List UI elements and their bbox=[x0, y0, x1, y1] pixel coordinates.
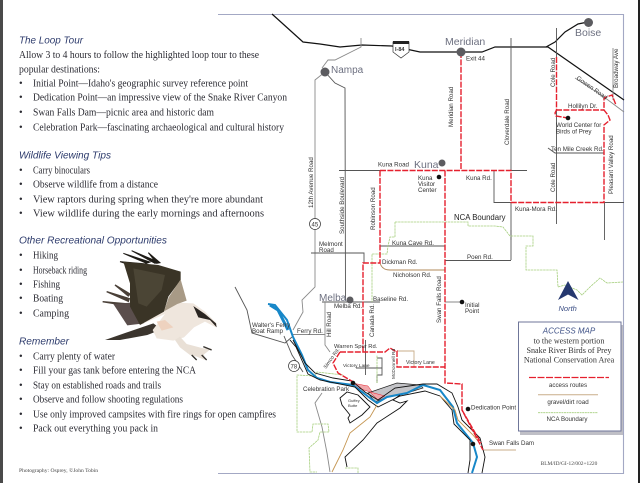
text block: remember list bbox=[19, 352, 276, 434]
roads bbox=[235, 28, 624, 472]
text block: remember list: • bbox=[19, 410, 23, 420]
text block: recreation list bbox=[19, 250, 87, 320]
text block: recreation list: • bbox=[19, 250, 23, 262]
highway 45 marker: 45 bbox=[312, 222, 319, 228]
road labels: Kuna bbox=[418, 175, 433, 182]
legend bbox=[518, 322, 623, 435]
icon: north arrow bbox=[558, 281, 578, 313]
text block: wildlife tips: View wildlife during the early mornings and afternoons bbox=[33, 208, 264, 220]
text block: remember list: Carry plenty of water bbox=[33, 352, 115, 362]
photo credit: Photography: Osprey, ©John Tobin bbox=[19, 467, 98, 474]
text block: wildlife tips: • bbox=[19, 208, 23, 220]
heading: Other Recreational Opportunities: Other Recreational Opportunities bbox=[19, 236, 167, 246]
city labels: Meridian bbox=[445, 36, 485, 48]
text block: recreation list: • bbox=[19, 280, 23, 290]
road labels: Victory Lane bbox=[406, 360, 435, 366]
legend: NCA boundary: NCA Boundary bbox=[547, 416, 588, 423]
text block: recreation list: Fishing bbox=[33, 280, 60, 290]
text block: recreation list: Hiking bbox=[33, 250, 58, 262]
road labels: Birds of Prey bbox=[556, 128, 592, 136]
text block: recreation list: • bbox=[19, 294, 23, 304]
text block: remember list: • bbox=[19, 380, 23, 392]
text block: loop tour: popular destinations: bbox=[19, 64, 100, 76]
road labels: Guffey bbox=[348, 398, 360, 403]
text block: wildlife tips: View raptors during spring when they're more abundant bbox=[33, 194, 263, 206]
legend subtitle: to the western portion bbox=[534, 336, 604, 346]
road labels: Boat Ramp bbox=[252, 328, 284, 335]
road labels: Swan Falls Dam bbox=[489, 440, 534, 447]
road labels: Melmont bbox=[319, 241, 343, 248]
text block: loop tour: • bbox=[19, 108, 23, 118]
highway: I-84: I-84 bbox=[395, 47, 405, 53]
city labels: Melba bbox=[319, 293, 347, 304]
heading: The Loop Tour: The Loop Tour bbox=[19, 36, 83, 46]
legend subtitle bbox=[524, 336, 615, 364]
road labels: Point bbox=[465, 308, 479, 315]
text block: loop tour: Celebration Park—fascinating archaeological and cultural history bbox=[33, 122, 285, 134]
icon: north arrow: North bbox=[558, 304, 577, 313]
text block: remember list: Pack out everything you pack in bbox=[33, 424, 159, 434]
road labels: NCA Boundary bbox=[454, 213, 506, 222]
icon: osprey bbox=[103, 251, 217, 360]
highway 78 marker bbox=[288, 360, 300, 372]
road labels: Hollilyn Dr. bbox=[568, 103, 598, 110]
road labels: Nicholson Rd. bbox=[393, 272, 432, 279]
city labels: Nampa bbox=[331, 65, 364, 76]
road labels: Exit 44 bbox=[466, 56, 485, 62]
text block: loop tour: Initial Point—Idaho's geographic survey reference point bbox=[33, 78, 248, 90]
text block: remember list: Fill your gas tank before entering the NCA bbox=[33, 366, 196, 376]
river and canyon bbox=[268, 304, 485, 473]
legend subtitle: National Conservation Area bbox=[524, 356, 615, 364]
road labels: Swan Falls Road bbox=[436, 276, 443, 323]
road labels: Meridian Road bbox=[448, 86, 455, 127]
road labels: McDonnell Rd bbox=[391, 349, 397, 379]
road labels: Gowen Road bbox=[575, 75, 609, 102]
text block: loop tour: • bbox=[19, 78, 23, 90]
road labels: Melba Rd. bbox=[334, 303, 362, 310]
legend subtitle: Snake River Birds of Prey bbox=[527, 346, 612, 355]
legend: gravel road: gravel/dirt road bbox=[547, 399, 589, 406]
road labels: Robinson Road bbox=[370, 187, 377, 230]
highway 78 marker: 78 bbox=[290, 364, 298, 370]
legend title: ACCESS MAP bbox=[542, 326, 596, 336]
point markers bbox=[351, 116, 570, 446]
road labels: World Center for bbox=[556, 122, 601, 129]
text block: loop tour: Swan Falls Dam—picnic area and historic dam bbox=[33, 108, 214, 118]
text block: recreation list: • bbox=[19, 266, 23, 276]
text block: wildlife tips: • bbox=[19, 180, 23, 190]
road labels: Cloverdale Road bbox=[504, 98, 511, 145]
road labels: Broadway Ave bbox=[613, 48, 620, 88]
road labels: Dickman Rd. bbox=[382, 259, 418, 266]
road labels: Kuna-Mora Rd. bbox=[515, 206, 557, 213]
road labels bbox=[252, 48, 620, 447]
text block: loop tour: • bbox=[19, 92, 23, 104]
road labels: Visitor bbox=[418, 181, 435, 188]
text block: remember list: • bbox=[19, 394, 23, 406]
text block: loop tour: Allow 3 to 4 hours to follow the highlighted loop tour to these bbox=[19, 50, 259, 61]
road labels: Celebration Park bbox=[303, 386, 350, 393]
publication number: BLM/ID/GI-12/002+1220 bbox=[541, 461, 598, 467]
road labels: Southside Boulevard bbox=[339, 176, 346, 234]
text block: loop tour bbox=[19, 50, 288, 134]
heading: Remember: Remember bbox=[19, 336, 70, 348]
text block: remember list: Observe and follow shooting regulations bbox=[33, 394, 183, 406]
road labels: Road bbox=[319, 247, 334, 254]
road labels: 12th Avenue Road bbox=[308, 157, 315, 208]
road labels: Kuna Cave Rd. bbox=[392, 240, 434, 247]
road labels: Kuna Road bbox=[378, 162, 410, 168]
text block: remember list: • bbox=[19, 366, 23, 376]
text block: remember list: • bbox=[19, 352, 23, 362]
road labels: Cole Road bbox=[550, 162, 557, 192]
road labels: Cole Road bbox=[550, 57, 557, 87]
city markers bbox=[320, 18, 593, 304]
text block: remember list: Use only improved campsites with fire rings for open campfires bbox=[33, 410, 276, 420]
text block: loop tour: Dedication Point—an impressive view of the Snake River Canyon bbox=[33, 92, 288, 104]
text block: recreation list: • bbox=[19, 308, 23, 320]
text block: recreation list: Boating bbox=[33, 294, 63, 304]
text block: wildlife tips: • bbox=[19, 194, 23, 206]
heading: Wildlife Viewing Tips: Wildlife Viewing Tips bbox=[19, 150, 111, 162]
road labels: Victory Lane bbox=[343, 363, 370, 369]
text block: wildlife tips: • bbox=[19, 166, 23, 176]
road labels: Dedication Point bbox=[471, 404, 516, 412]
city labels bbox=[319, 27, 601, 304]
road labels: Ten Mile Creek Rd. bbox=[551, 146, 604, 153]
legend: access routes: access routes bbox=[549, 382, 587, 389]
road labels: Poen Rd. bbox=[467, 254, 493, 261]
road labels: Kuna Rd. bbox=[466, 175, 492, 182]
road labels: Hill Road bbox=[326, 311, 333, 337]
road labels: Baseline Rd. bbox=[373, 296, 408, 303]
text block: wildlife tips: Carry binoculars bbox=[33, 166, 90, 176]
road labels: Simco Rd. bbox=[323, 347, 341, 370]
text block: recreation list: Horseback riding bbox=[33, 266, 87, 276]
NCA boundary bbox=[297, 222, 623, 473]
road labels: Center bbox=[418, 187, 437, 194]
access routes bbox=[333, 52, 616, 450]
text block: recreation list: Camping bbox=[33, 308, 69, 320]
text block: wildlife tips bbox=[19, 166, 264, 220]
city labels: Kuna bbox=[414, 159, 439, 171]
road labels: Walter's Ferry bbox=[252, 322, 291, 329]
highway: I-84 bbox=[272, 14, 624, 100]
text block: remember list: Stay on established roads and trails bbox=[33, 380, 161, 392]
panel: access map bbox=[218, 14, 624, 474]
text block: wildlife tips: Observe wildlife from a distance bbox=[33, 180, 158, 190]
highway 45 marker bbox=[310, 218, 320, 230]
road labels: Initial bbox=[465, 302, 479, 309]
road labels: Ferry Rd. bbox=[297, 328, 323, 335]
text block: remember list: • bbox=[19, 424, 23, 434]
road labels: Canada Rd. bbox=[369, 304, 376, 337]
text block: loop tour: • bbox=[19, 122, 23, 134]
city labels: Boise bbox=[575, 27, 601, 39]
road labels: Warren Spur Rd. bbox=[334, 344, 378, 350]
road labels: Pleasant Valley Road bbox=[608, 135, 615, 194]
road labels: Butte bbox=[348, 403, 358, 408]
